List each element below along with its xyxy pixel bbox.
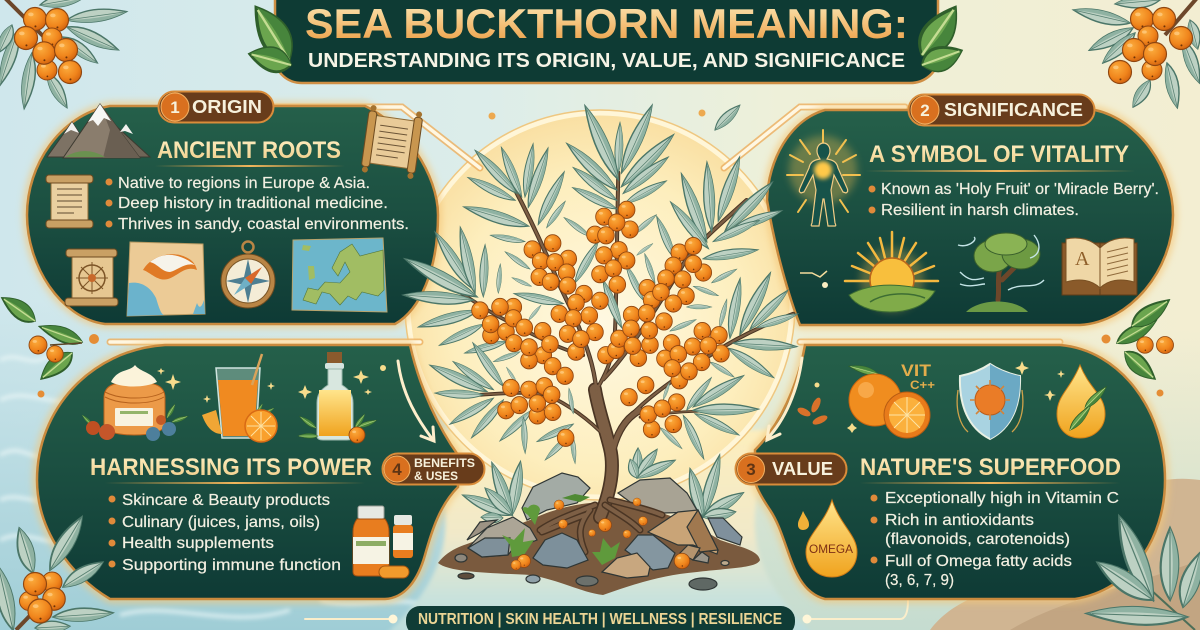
bullet list: origin: [106, 175, 409, 233]
icon: vitamin c text: [901, 361, 935, 392]
bullet list: benefits: Culinary (juices, jams, oils): [122, 514, 320, 531]
icon: windswept tree: [958, 233, 1044, 312]
fallen berries: [511, 498, 690, 570]
panel: significance: [767, 94, 1173, 325]
sprig: top right: [1072, 0, 1200, 110]
sprig: bottom left: [0, 513, 113, 630]
icon: map of europe: [292, 238, 387, 312]
soil mound: [438, 502, 760, 595]
sprig: left middle: [29, 320, 99, 398]
panel: benefits and uses: [37, 345, 484, 599]
bullet list: benefits: Supporting immune function: [122, 557, 341, 574]
front rocks: [455, 510, 729, 590]
leaves peeking at panel edges: [0, 291, 1174, 333]
label: benefits and uses: BENEFITS: [414, 456, 475, 470]
label: origin: ORIGIN: [192, 97, 262, 117]
roots: [540, 500, 662, 552]
icon: cream jar: [81, 365, 189, 441]
icon: oil drop with leaf: [1057, 365, 1109, 438]
icon: glowing person: [787, 130, 860, 226]
main title: SEA BUCKTHORN MEANING:: [305, 0, 908, 47]
rocks behind: [467, 473, 742, 545]
central glowing sun circle: [380, 110, 820, 630]
bullet list: significance: Resilient in harsh climates.: [881, 202, 1079, 219]
sprig: right middle: [1102, 315, 1174, 396]
icon: small scroll: [46, 175, 93, 228]
label: significance: [908, 94, 1094, 126]
icon: open book: [1062, 238, 1137, 295]
arrow: origin to benefits: [398, 361, 434, 441]
heading: nature's superfood: NATURE'S SUPERFOOD: [860, 454, 1121, 481]
bullet list: origin: Thrives in sandy, coastal environments.: [118, 216, 409, 233]
grass tufts: [502, 494, 620, 565]
foliage: [402, 103, 799, 464]
berries: [472, 201, 729, 446]
label: benefits and uses: 4: [392, 460, 402, 479]
icon: omega drop: [798, 500, 857, 577]
bullet list: benefits: Skincare & Beauty products: [122, 492, 330, 509]
decorative orange dots and falling leaf: [488, 102, 743, 133]
panel: value: [736, 345, 1165, 599]
ground behind the tree: [438, 446, 760, 595]
title leaves left: [245, 0, 301, 76]
bullet list: value: (flavonoids, carotenoids): [885, 531, 1070, 548]
spark trail: [800, 271, 828, 288]
subtitle: UNDERSTANDING ITS ORIGIN, VALUE, AND SIGNIFICANCE: [308, 50, 905, 72]
ground in front of the tree: [455, 494, 729, 590]
bullet list: benefits: [108, 492, 341, 574]
icon: juice glass: [202, 354, 277, 442]
bullet list: value: [870, 490, 1119, 589]
bullet list: benefits: Health supplements: [122, 535, 274, 552]
label: significance: SIGNIFICANCE: [944, 100, 1083, 120]
icon: map of asia: [127, 242, 205, 316]
label: significance: 2: [920, 101, 930, 120]
bullet list: value: Rich in antioxidants: [885, 512, 1034, 529]
icon: shield: [957, 364, 1023, 439]
icon: mountains: [47, 104, 150, 158]
heading: harnessing its power: HARNESSING ITS POWER: [90, 454, 372, 481]
icon: open book: A: [1075, 248, 1090, 270]
label: value: [736, 454, 846, 484]
bullet list: origin: Native to regions in Europe & Asia.: [118, 175, 370, 192]
label: value: 3: [746, 460, 756, 479]
bullet list: value: (3, 6, 7, 9): [885, 572, 954, 589]
icon: compass-rose scroll: [65, 249, 118, 306]
label: benefits and uses: [382, 454, 484, 484]
icon: large scroll: [361, 105, 423, 179]
sparkles: [157, 365, 386, 403]
bullet list: significance: Known as 'Holy Fruit' or 'Miracle Berry'.: [881, 181, 1159, 198]
bottom keyword bar: [406, 606, 795, 630]
connector lines: [110, 107, 1060, 619]
icon: omega drop: OMEGA: [809, 544, 853, 556]
label: benefits and uses: & USES: [414, 469, 458, 483]
icon: vitamin c text: C++: [910, 378, 935, 392]
sprig: bottom right: [1087, 513, 1200, 630]
icon: compass: [221, 242, 275, 308]
label: value: VALUE: [772, 459, 833, 479]
bullet list: origin: Deep history in traditional medicine.: [118, 195, 388, 212]
icon: oil bottle: [298, 352, 378, 443]
bullet list: significance: [868, 181, 1159, 219]
panel: origin: [27, 92, 438, 324]
heading: a symbol of vitality: A SYMBOL OF VITALITY: [869, 141, 1129, 168]
ground plants: [461, 446, 746, 523]
bottom keyword bar: NUTRITION | SKIN HEALTH | WELLNESS | RESILIENCE: [418, 611, 782, 628]
title banner: [245, 0, 967, 83]
trunk and branches: [443, 173, 793, 517]
bullet list: value: Exceptionally high in Vitamin C: [885, 490, 1119, 507]
sprig: top left: [0, 0, 127, 110]
icon: rising sun: [845, 232, 938, 312]
sparkles and small sprig: [796, 361, 1065, 433]
icon: vitamin c text: VIT: [901, 361, 932, 380]
label: origin: [158, 92, 274, 122]
icon: supplement bottles: [353, 506, 413, 578]
arrow: significance to value: [767, 358, 802, 440]
tree illustration: [402, 103, 799, 517]
icon: orange: [848, 363, 930, 438]
bullet list: value: Full of Omega fatty acids: [885, 553, 1072, 570]
title leaves right: [911, 0, 967, 76]
heading: ancient roots: ANCIENT ROOTS: [157, 137, 341, 164]
label: origin: 1: [170, 98, 180, 117]
